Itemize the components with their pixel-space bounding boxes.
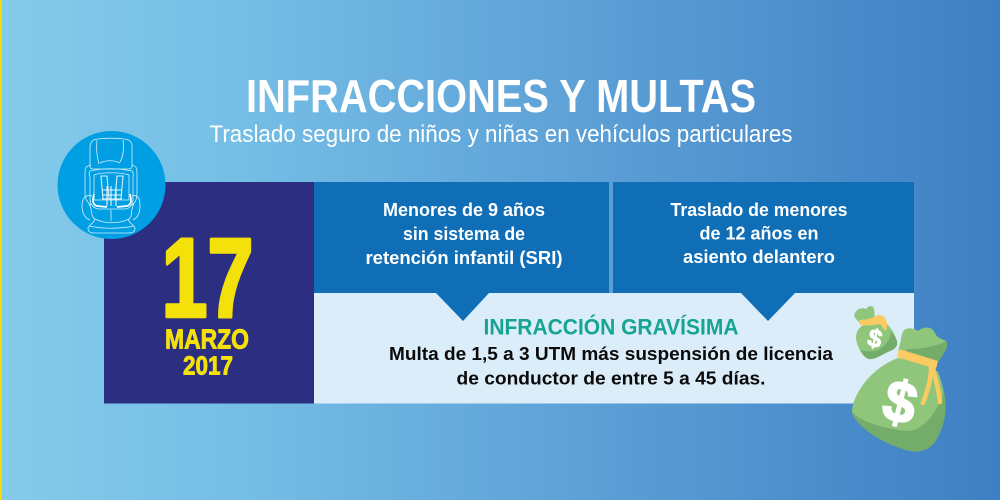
panel: penalty [314,293,914,404]
panel: under 12 front seat [613,182,914,321]
date day: 17 [162,216,254,340]
panel: under 12 front seat: Traslado de menores [670,200,848,220]
panel: under 9 without SRI: Menores de 9 años [383,200,545,220]
icon: large money bag: $ [877,367,924,438]
title: INFRACCIONES Y MULTAS [246,70,756,122]
panel: under 9 without SRI: sin sistema de [403,224,525,244]
penalty text: de conductor de entre 5 a 45 días. [456,368,766,388]
penalty text [389,343,834,388]
icon: small money bag: $ [865,324,885,354]
icon: large money bag [852,327,947,452]
icon: child car seat [58,131,166,239]
penalty text: Multa de 1,5 a 3 UTM más suspensión de licencia [389,343,834,364]
panel: under 12 front seat: de 12 años en [700,224,818,244]
icon: small money bag [854,306,897,359]
left yellow edge [0,0,2,500]
date year: 2017 [183,350,233,380]
panel: under 9 without SRI: retención infantil (SRI) [366,248,562,268]
panel: date [104,182,314,404]
subtitle: Traslado seguro de niños y niñas en vehículos particulares [210,121,792,148]
panel: under 9 without SRI [314,182,609,321]
panel: under 12 front seat: asiento delantero [683,247,835,267]
date month: MARZO [165,324,249,354]
penalty heading: INFRACCIÓN GRAVÍSIMA [484,314,738,340]
